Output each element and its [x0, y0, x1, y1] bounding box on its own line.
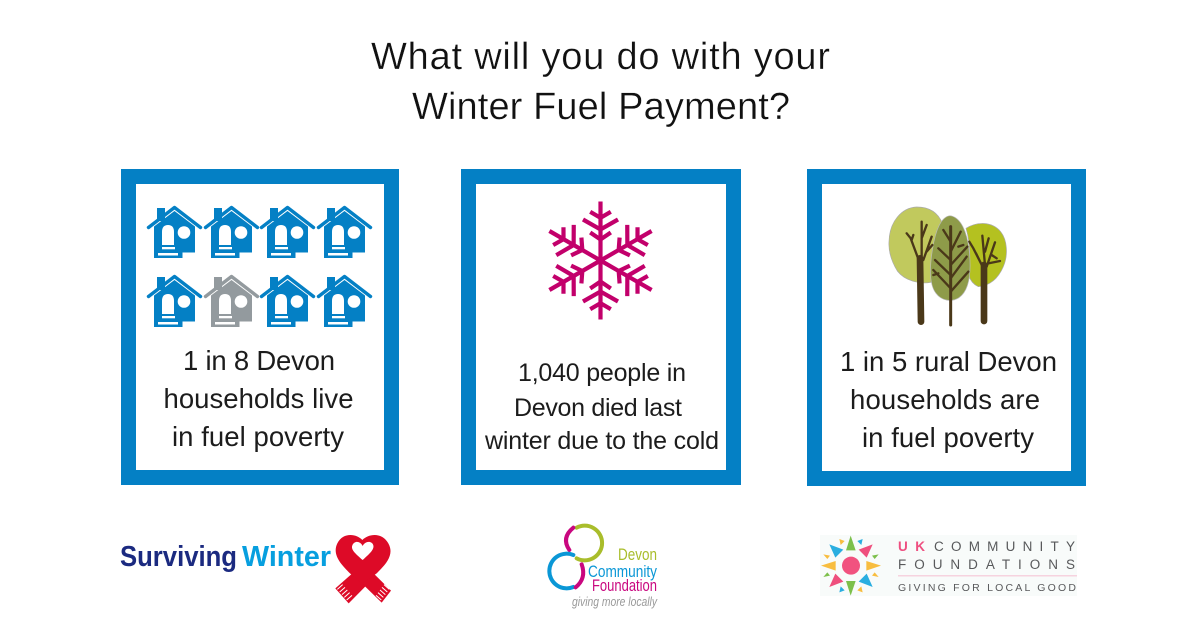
text: logo wordmark: giving more locally	[572, 594, 658, 609]
text: 1 in 8 households: in fuel poverty	[172, 421, 344, 452]
icon: interlocking rings	[549, 526, 602, 588]
panel: cold deaths	[468, 176, 734, 478]
icon: snowflake	[541, 202, 660, 320]
title	[371, 36, 830, 128]
text: logo wordmark: FOUNDATIONS	[898, 557, 1075, 572]
panel: rural households	[814, 176, 1078, 478]
text: 1,040 people: Devon died last	[514, 394, 682, 422]
text: 1,040 people	[484, 359, 719, 455]
text: logo wordmark	[572, 545, 658, 609]
text: 1,040 people: 1,040 people in	[518, 359, 686, 387]
panel: households in fuel poverty	[128, 176, 392, 478]
icon: three trees	[889, 207, 1006, 325]
text: 1 in 8 households: 1 in 8 Devon	[183, 345, 335, 376]
text: 1 in 5 rural: 1 in 5 rural Devon	[840, 346, 1057, 377]
icon: sunburst	[821, 536, 881, 596]
text: 1 in 5 rural	[840, 346, 1057, 453]
text: logo wordmark: GIVING FOR LOCAL GOOD	[898, 582, 1076, 594]
text: logo wordmark: COMMUNITY	[934, 539, 1075, 554]
logo: UK Community Foundations	[820, 535, 1077, 596]
text: 1,040 people: winter due to the cold	[484, 427, 719, 455]
text: 1 in 8 households	[164, 345, 354, 452]
text: logo wordmark: Foundation	[592, 576, 657, 595]
text: 1 in 5 rural: households are	[850, 384, 1040, 415]
title: Winter Fuel Payment?	[412, 86, 790, 128]
icon: eight houses, one grey	[148, 208, 370, 327]
logo: Surviving Winter	[120, 535, 391, 603]
text: 1 in 8 households: households live	[164, 383, 354, 414]
text: 1 in 5 rural: in fuel poverty	[862, 422, 1034, 453]
text: logo wordmark	[898, 539, 1077, 594]
text: logo wordmark: UK	[898, 539, 925, 554]
logo: Surviving Winter: Winter	[242, 541, 331, 573]
title: What will you do with your	[371, 36, 830, 78]
logo: Devon Community Foundation	[549, 526, 658, 609]
icon: heart scarf	[335, 535, 391, 603]
text: logo wordmark: Devon	[618, 545, 657, 564]
text: logo wordmark: Community	[588, 562, 657, 581]
logo: Surviving Winter: Surviving	[120, 541, 237, 573]
